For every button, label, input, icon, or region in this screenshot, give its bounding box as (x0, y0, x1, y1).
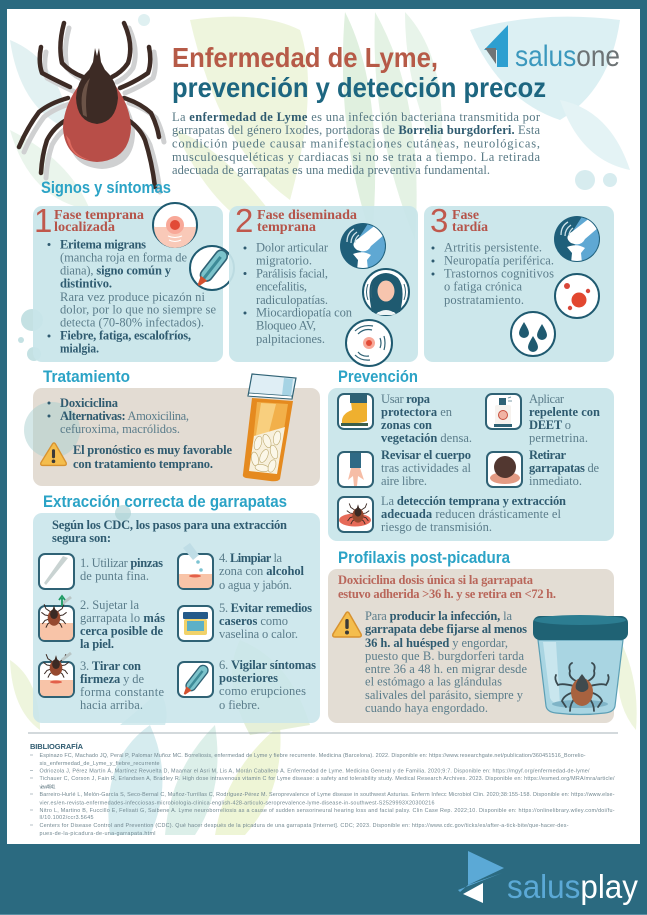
panel: fase 3: postratamiento. (444, 293, 524, 307)
panel: prevencion: Usar ropa (381, 392, 431, 406)
bibliography: Nitro L, Martino B, Fuccillo E, Felisati G, Saibene A. Lyme neuroborreliosis as a cause of sudden sensorineural hearing loss and facial palsy. Clin Case Rep. 2022;10. Disponible en: https://onlinelibrary.wiley.com/doi/fu- (40, 808, 615, 814)
icon: body check (338, 452, 373, 487)
panel: fase 2: migratorio. (256, 253, 312, 267)
panel: extraccion: vaselina o calor. (219, 627, 298, 641)
panel: profilaxis: estuvo adherida >36 h. y se retira en <72 h. (338, 587, 556, 601)
heading: extraccion: Extracción correcta de garrapatas (43, 493, 287, 511)
heading: prevencion: Prevención (338, 368, 418, 386)
panel: fase 1 (33, 202, 234, 362)
panel: extraccion: 6. Vigilar síntomas (219, 658, 316, 672)
panel: fase 1: mialgia. (60, 342, 99, 356)
icon: knee joint (340, 222, 387, 270)
icon: pull tick (39, 653, 74, 697)
icon: boot (338, 394, 373, 429)
icon: warning (333, 612, 361, 637)
panel: fase 3: tardía (452, 220, 488, 235)
bibliography (28, 733, 618, 837)
callout: prognosis: El pronóstico es muy favorable (73, 443, 232, 457)
bibliography: BIBLIOGRAFÍA (30, 742, 84, 751)
panel: fase 2: encefalitis, (256, 280, 307, 294)
panel: fase 1: Rara vez produce picazón ni (60, 290, 206, 304)
text block: infection: 36 h. al huésped y engordar, (365, 636, 508, 650)
illustration: tick (19, 23, 164, 192)
panel: fase 1: distintivo. (60, 277, 112, 291)
panel: prevencion: Revisar el cuerpo (381, 448, 471, 462)
panel: prevencion: aire libre. (381, 474, 427, 488)
illustration: specimen jar (533, 615, 628, 714)
panel: extraccion: la piel. (80, 637, 114, 651)
panel: prevencion: garrapatas de (529, 461, 599, 475)
panel: fase 1: (mancha roja en forma de (60, 251, 187, 265)
panel: fase 1: localizada (54, 220, 115, 235)
illustration: pill bottle (243, 374, 296, 481)
panel: extraccion: zona con alcohol (219, 564, 305, 578)
panel: extraccion: Según los CDC, los pasos para una extracción (52, 518, 287, 532)
icon: tick bite (338, 497, 373, 532)
panel: extraccion: 5. Evitar remedios (219, 601, 312, 615)
panel: fase 1: Fase temprana (54, 208, 144, 223)
bibliography: sis_enfermedad_de_Lyme_y_fiebre_recurrente (40, 761, 160, 767)
panel: fase 1: Fiebre, fatiga, escalofríos, (60, 329, 191, 343)
text block: infection: cuando haya engordado. (365, 701, 488, 715)
panel: prevencion: repelente con (529, 405, 600, 419)
panel: fase 3: Artritis persistente. (444, 241, 542, 255)
panel: prevencion: Retirar (529, 448, 566, 462)
bibliography: Centers for Disease Control and Prevention (CDC). Qué hacer después de la picadura de una garrapata [Internet]. CDC; 2023. Disponible en: https://www.cdc.gov/ticks/es/after-a-tick-bite/que-hacer-des- (40, 823, 569, 829)
text block: infection: Para producir la infección, la (365, 609, 512, 623)
icon: vaseline jar (178, 606, 213, 641)
icon: thermometer (190, 246, 234, 290)
panel: extraccion: posteriores (219, 671, 278, 685)
logo: salusplay: salusplay (507, 868, 638, 905)
panel: extraccion: garrapata lo más (80, 611, 165, 625)
title (172, 42, 546, 103)
icon: heart block waves (346, 320, 392, 366)
panel: fase 2: Miocardiopatía con (256, 305, 353, 319)
intro text: adecuada de garrapatas es una medida preventiva fundamental. (172, 163, 490, 177)
callout: prognosis (73, 443, 232, 471)
panel: prevencion: La detección temprana y extracción (381, 494, 566, 508)
bibliography: Barreiro-Hurlé L, Melón-García S, Seco-Bernal C, Muñoz-Turrillas C, Rodríguez-Pérez M. Seroprevalence of Lyme disease in southwest Asturias. Enferm Infecc Microbiol Clin. 2020;38:155-158. Disponible en: https://www.else- (40, 792, 615, 798)
panel: prevencion: protectora en (381, 405, 453, 419)
panel: fase 2: 2 (235, 202, 253, 239)
title: prevención y detección precoz (172, 72, 546, 103)
icon: red cells (555, 274, 599, 318)
intro text (172, 110, 541, 177)
panel: extraccion: 2. Sujetar la (80, 598, 139, 612)
panel: fase 3 (424, 202, 614, 362)
panel: profilaxis (328, 569, 628, 723)
panel: prevencion: inmediato. (529, 474, 582, 488)
panel: extraccion: hacia arriba. (80, 698, 143, 712)
panel: extraccion: caseros como (219, 614, 288, 628)
panel: extraccion: como erupciones (219, 684, 306, 698)
panel: fase 1: detecta (70-80% infectados). (60, 316, 204, 330)
heading: profilaxis: Profilaxis post-picadura (338, 549, 511, 567)
panel: fase 3: 3 (430, 202, 448, 239)
icon: warning (41, 443, 66, 465)
panel: extraccion: segura son: (52, 531, 111, 545)
panel: prevencion: zonas con (381, 418, 432, 432)
text block: infection: salivales del parásito, siempre y (365, 688, 524, 702)
icon: joint (554, 215, 601, 263)
heading: tratamiento: Tratamiento (43, 368, 130, 386)
icon: tweezers (39, 554, 74, 589)
panel: fase 3: o fatiga crónica (444, 280, 522, 294)
icon: thermometer (178, 662, 213, 697)
panel: prevencion: riesgo de transmisión. (381, 520, 492, 534)
logo: salusone: salusone (515, 40, 620, 73)
bibliography: view/4941 (40, 784, 56, 790)
panel: prevencion: permetrina. (529, 431, 588, 445)
footer edge line (0, 914, 647, 915)
logo: salusplay (458, 851, 638, 905)
callout: prognosis: con tratamiento temprano. (73, 457, 213, 471)
title: Enfermedad de Lyme, (172, 42, 438, 73)
icon: woman with hearing waves (363, 269, 409, 315)
icon: target rash (153, 203, 197, 248)
panel: fase 1: diana), signo común y (60, 264, 172, 278)
panel: fase 2: Parálisis facial, (256, 266, 328, 280)
panel: extraccion: forma constante (80, 685, 164, 699)
panel: tratamiento: Doxiciclina (60, 396, 119, 410)
panel: profilaxis: Doxiciclina dosis única si la garrapata (338, 573, 534, 587)
bibliography: ll/10.1002/ccr3.5645 (40, 815, 94, 821)
icon: sweat drops (511, 312, 555, 356)
icon: grasp tick (39, 596, 74, 641)
panel: prevencion: Aplicar (529, 392, 565, 406)
panel: fase 2: Fase diseminada (257, 208, 357, 223)
bibliography: Tichauer C, Corson J, Fain R, Erlandsen A, Bradley R. High dose intravenous vitamin C for Lyme disease: a safety and tolerability study. Medical Research Archives. 2023. Disponible en: https://esmed.org/MRA/mra/article/ (40, 776, 615, 782)
icon: repellent spray (486, 394, 521, 429)
panel: fase 3: Neuropatía periférica. (444, 253, 554, 267)
panel: tratamiento (24, 374, 320, 486)
panel: extraccion: firmeza y de (80, 672, 144, 686)
logo: salusone (484, 25, 620, 73)
panel: extraccion: 3. Tirar con (80, 659, 141, 673)
panel: tratamiento: Alternativas: Amoxicilina, (60, 409, 189, 423)
panel: prevencion: tras actividades al (381, 461, 472, 475)
intro text: condición puede causar manifestaciones cutáneas, neurológicas, (172, 136, 540, 150)
panel: fase 3: Trastornos cognitivos (444, 267, 554, 281)
intro text: musculoesqueléticas y cardiacas si no se trata a tiempo. La retirada (172, 150, 540, 164)
text block: infection (365, 609, 527, 715)
panel: prevencion (328, 388, 614, 541)
panel: prevencion: vegetación densa. (381, 431, 472, 445)
panel: extraccion: o fiebre. (219, 698, 260, 712)
panel: extraccion: 4. Limpiar la (219, 551, 282, 565)
text block: infection: garrapata debe fijarse al menos (365, 622, 527, 636)
intro text: La enfermedad de Lyme es una infección bacteriana transmitida por (172, 110, 541, 124)
panel: fase 3: Fase (452, 208, 479, 223)
panel: tratamiento: cefuroxima, macrólidos. (60, 422, 180, 436)
text block: infection: entre 36 a 48 h. en migrar desde (365, 662, 527, 676)
bibliography: Espinazo FC, Machado JQ, Peral P, Palomar Muñoz MC. Borreliosis, enfermedad de Lyme y fiebre recurrente. Medicina (Barcelona). 2022. Disponible en: https://www.researchgate.net/publication/360451516_Borrelio- (40, 753, 586, 759)
icon: clean wound (178, 543, 213, 589)
panel: extraccion: 1. Utilizar pinzas (80, 556, 163, 570)
panel: fase 2: temprana (257, 220, 316, 235)
panel: fase 1: 1 (34, 202, 52, 239)
panel: fase 1: dolor, por lo que no siempre se (60, 303, 216, 317)
panel: prevencion: DEET o (529, 418, 571, 432)
text block: infection: puesto que B. burgdorferi tarda (365, 649, 524, 663)
intro text: garrapatas del género Ixodes, portadoras de Borrelia burgdorferi. Esta (172, 123, 540, 137)
panel: extraccion: de punta fina. (80, 569, 149, 583)
bibliography: Odriozola J, Pérez Martín Á, Martínez Revuelta D, Maamar el Asri M, Lis A, Morán Caballero A. Enfermedad de Lyme. Medicina General y de Familia. 2020;9:7. Disponible en: https://mgyf.org/enfermedad-de-lyme/ (40, 768, 590, 774)
panel: extraccion: cerca posible de (80, 624, 163, 638)
bibliography: vier.es/en-revista-enfermedades-infecciosas-microbiologia-clinica-english-428-articulo-seroprevalence-lyme-disease-in-southwest-S2529993X20300216 (40, 800, 434, 806)
icon: tick on skin (487, 452, 522, 487)
panel: prevencion: adecuada reducen drásticamente el (381, 507, 562, 521)
panel: fase 1: Eritema migrans (60, 238, 146, 252)
panel: fase 2: radiculopatías. (256, 293, 328, 307)
panel: fase 2: Bloqueo AV, (256, 319, 316, 333)
panel: extraccion: o agua y jabón. (219, 578, 292, 592)
panel: extraccion (33, 505, 320, 723)
panel: fase 2 (229, 202, 418, 366)
heading: signos y sintomas: Signos y síntomas (41, 179, 171, 197)
text block: infection: el estómago a las glándulas (365, 674, 502, 688)
bibliography: pues-de-la-picadura-de-una-garrapata.html (40, 831, 156, 837)
panel: fase 2: palpitaciones. (256, 332, 325, 346)
panel: fase 2: Dolor articular (256, 241, 329, 255)
